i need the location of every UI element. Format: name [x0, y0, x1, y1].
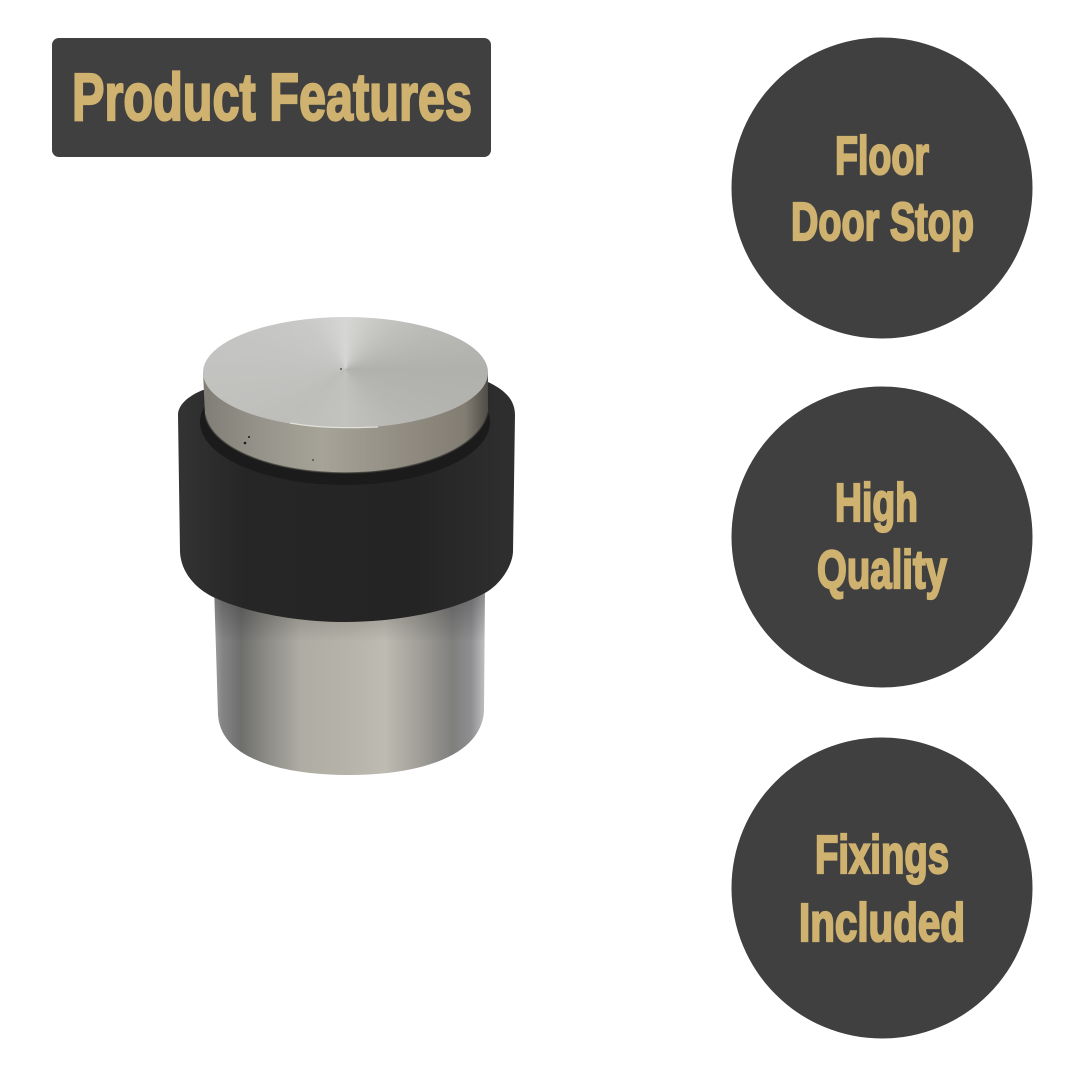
product photo: floor door stop: [178, 359, 515, 775]
badge text: [799, 825, 965, 953]
steel cap top face: [203, 317, 488, 428]
title text: Product Features: [72, 60, 472, 135]
badge text: Door Stop: [791, 192, 974, 252]
surface specks: [244, 436, 314, 461]
feature badge: high quality: [732, 386, 1032, 688]
rubber ring inner rim: [200, 359, 490, 485]
badge text: Included: [799, 893, 965, 953]
badge text: Fixings: [815, 825, 949, 885]
feature badge: fixings included: [732, 738, 1032, 1038]
cap lower edge shadow: [205, 412, 488, 473]
badge text: Floor: [835, 126, 929, 186]
badge text: High: [835, 473, 918, 533]
title banner: [52, 38, 491, 157]
steel cap side: [203, 372, 488, 473]
feature badge: floor door stop: [732, 38, 1032, 338]
badge text: [791, 126, 974, 252]
rubber ring: [178, 382, 515, 622]
badge text: Quality: [817, 540, 947, 600]
lower steel cylinder: [214, 585, 485, 775]
badge text: [817, 473, 947, 600]
